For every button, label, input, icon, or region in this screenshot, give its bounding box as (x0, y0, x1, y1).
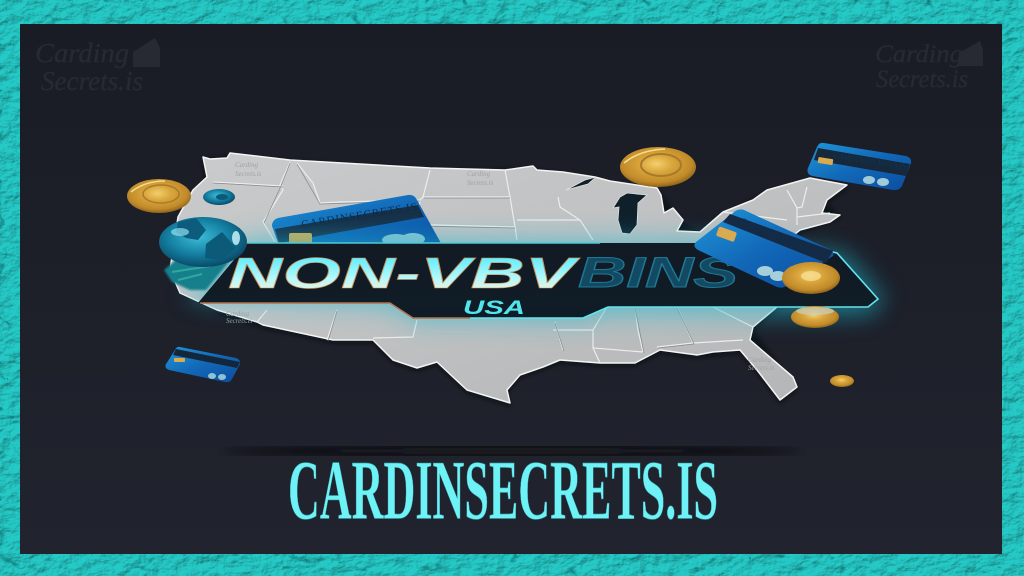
watermark: top right: Carding (875, 41, 963, 68)
coin: below banner (791, 306, 839, 328)
banner: NON-VBV BINS USA (198, 243, 878, 319)
watermark: top left (35, 38, 160, 96)
small map watermarks: Secrets.is (235, 170, 262, 178)
small map watermarks: Carding (748, 356, 772, 364)
banner glow (185, 238, 885, 322)
map of the USA (170, 153, 847, 406)
watermark: top right (875, 41, 983, 93)
watermark: top left: Secrets.is (41, 66, 143, 96)
small map watermarks: Secrets.is (226, 317, 253, 325)
subheading: USA: USA (463, 298, 525, 319)
coin: on banner (782, 262, 840, 294)
small map watermarks: Secrets.is (467, 179, 494, 187)
small map watermarks: Secrets.is (748, 364, 775, 372)
map shadow (203, 156, 847, 406)
credit card: behind banner: CARDINSECRETS.IS (301, 201, 419, 231)
watermark: top left: Carding (35, 38, 129, 68)
banner plate (198, 243, 878, 318)
watermark: top right: Secrets.is (876, 66, 968, 93)
credit card: lower left (165, 347, 240, 382)
globe: small (203, 189, 235, 205)
credit card: centre right: CARDINSECRETS.IS (739, 216, 820, 257)
coin: small (830, 375, 854, 387)
coin: far left (127, 179, 191, 213)
coin: top centre (620, 147, 696, 187)
map land (170, 153, 847, 403)
small map watermarks: Carding (226, 310, 250, 318)
credit card: top right (808, 143, 911, 190)
small map watermarks: Carding (467, 170, 491, 178)
heading: NON-VBV: NON-VBV (228, 249, 581, 298)
lake cutouts (566, 177, 647, 234)
globe: large (159, 217, 247, 267)
small map watermarks (226, 161, 775, 372)
heading: BINS: BINS (578, 249, 738, 297)
ground shadow (222, 447, 802, 455)
credit card: centre right (694, 209, 834, 288)
credit card: top right: CARDINSECRETS.IS (833, 151, 907, 172)
state lines (213, 162, 830, 363)
small map watermarks: Carding (235, 161, 259, 169)
credit card: behind banner (272, 195, 442, 248)
globe reflection (164, 258, 232, 290)
